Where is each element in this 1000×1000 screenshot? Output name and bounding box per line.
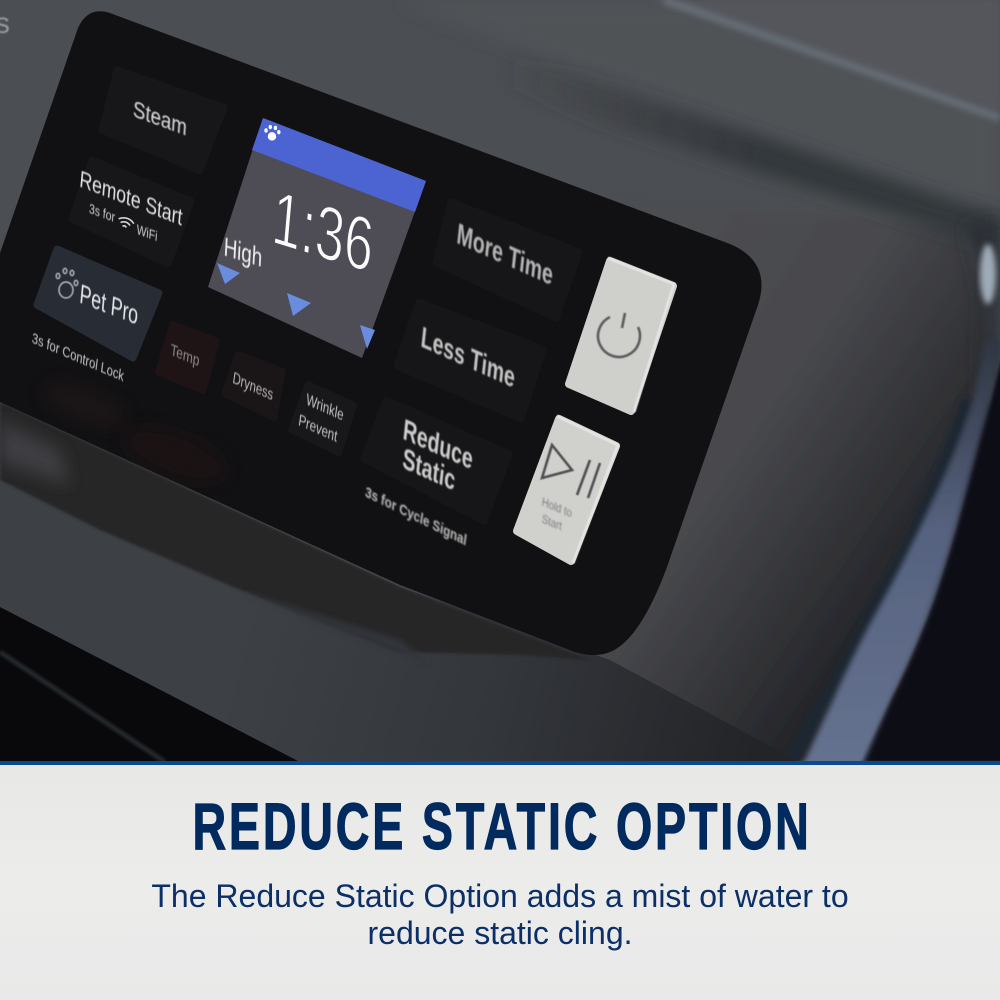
- photo: dryer control panel: [0, 0, 1000, 761]
- body text: [151, 878, 849, 951]
- upper light edge: [664, 0, 1000, 118]
- body text: reduce static cling.: [367, 915, 632, 951]
- button: power: [569, 258, 674, 412]
- right dark side: [860, 330, 1000, 762]
- shadow band: [500, 50, 1000, 250]
- control panel: [0, 11, 762, 655]
- button: Reduce Static: [364, 400, 509, 521]
- console face right of panel: [400, 200, 990, 762]
- button: Reduce Static: Static: [401, 442, 457, 497]
- icon: power: [598, 313, 640, 357]
- button: Steam: [102, 70, 224, 171]
- icon: paw outline: [56, 268, 78, 298]
- button: Less Time: Less Time: [419, 321, 517, 395]
- button: play pause: [517, 416, 618, 563]
- button: Pet Pro: [37, 249, 159, 358]
- label: High: High: [223, 231, 263, 272]
- time: 1:36: [269, 173, 377, 289]
- button: Pet Pro: Pet Pro: [79, 278, 139, 330]
- button: Steam: Steam: [132, 96, 188, 141]
- button: Remote Start: [72, 160, 191, 264]
- button: More Time: [436, 202, 579, 318]
- arrows: [217, 263, 375, 349]
- button: Remote Start: 3s for: [88, 201, 115, 226]
- button: Remote Start: Remote Start: [78, 167, 184, 231]
- button: Wrinkle Prevent: Prevent: [297, 411, 339, 445]
- right corner highlight: [980, 244, 996, 304]
- button: More Time: More Time: [455, 218, 555, 292]
- icon: wifi: [117, 216, 135, 229]
- button: Wrinkle Prevent: Wrinkle: [305, 390, 345, 424]
- button: Temp: [158, 324, 217, 391]
- button: Dryness: [224, 354, 283, 418]
- label: control lock: 3s for Control Lock: [31, 330, 125, 385]
- title: REDUCE STATIC OPTION: [192, 789, 812, 863]
- button: Reduce Static: Reduce: [402, 414, 474, 476]
- label: cycle signal: 3s for Cycle Signal: [364, 484, 468, 549]
- reflective strip under panel: [0, 402, 590, 660]
- lower console lip: [0, 402, 800, 762]
- lower dark gap: [0, 607, 300, 762]
- right corner shadow: [965, 220, 1000, 400]
- blue edge strip: [800, 340, 1000, 770]
- icon: play pause: [542, 445, 600, 498]
- button: play pause: Hold to: [541, 496, 573, 521]
- button: Dryness: Dryness: [232, 368, 274, 404]
- button: Wrinkle Prevent: [291, 384, 354, 453]
- blue edge shadow: [790, 400, 968, 762]
- button: Less Time: [397, 302, 543, 419]
- icon: paw: [264, 125, 280, 141]
- upper console surface: [400, 0, 1000, 210]
- button: Temp: Temp: [170, 342, 200, 371]
- button: Remote Start: WiFi: [136, 222, 158, 245]
- body text: The Reduce Static Option adds a mist of water to: [151, 878, 849, 914]
- caption band: [0, 761, 1000, 1000]
- display: [208, 118, 426, 358]
- button: play pause: Start: [541, 513, 563, 534]
